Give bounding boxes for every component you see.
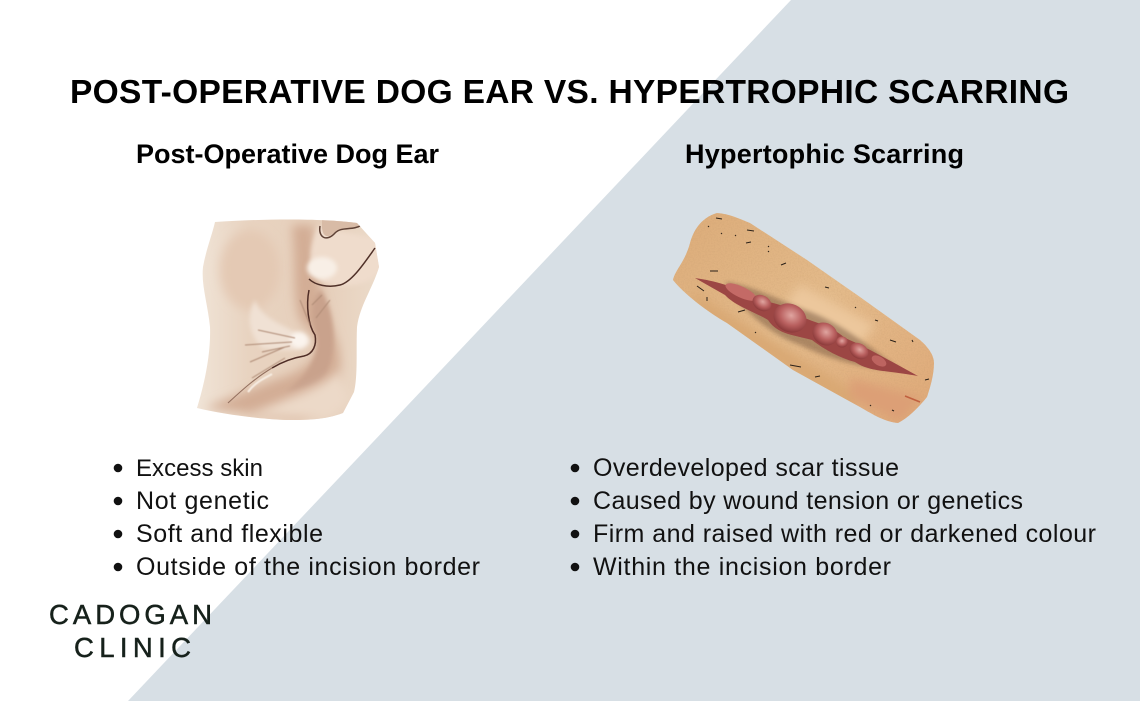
logo: Cadogan Clinic: CADOGAN xyxy=(49,599,212,630)
heading: hypertrophic scarring: Hypertophic Scarring xyxy=(685,139,964,169)
bullet list: hypertrophic scarring: Caused by wound tension or genetics xyxy=(593,487,1023,515)
title: POST-OPERATIVE DOG EAR VS. HYPERTROPHIC SCARRING xyxy=(70,74,1069,111)
bullet list: dog ear: Outside of the incision border xyxy=(136,553,480,581)
logo: Cadogan Clinic xyxy=(49,599,212,663)
bullet list: dog ear: Excess skin xyxy=(136,455,263,482)
scar ridge nodules xyxy=(695,278,918,376)
illustration: post-operative dog ear xyxy=(197,220,379,420)
bullet list: hypertrophic scarring: Overdeveloped scar tissue xyxy=(593,454,899,482)
illustration: hypertrophic scar xyxy=(673,213,934,423)
bullet list: hypertrophic scarring: Firm and raised with red or darkened colour xyxy=(593,520,1096,548)
bullet list: dog ear: Not genetic xyxy=(136,487,269,515)
bullet list: dog ear xyxy=(114,455,480,581)
bullet list: dog ear: Soft and flexible xyxy=(136,520,323,548)
bullet list: hypertrophic scarring xyxy=(571,454,1096,581)
heading: post-operative dog ear: Post-Operative Dog Ear xyxy=(136,139,439,169)
bullet list: hypertrophic scarring: Within the incision border xyxy=(593,553,891,581)
scar hair halo xyxy=(725,282,900,370)
logo: Cadogan Clinic: CLINIC xyxy=(74,632,191,663)
